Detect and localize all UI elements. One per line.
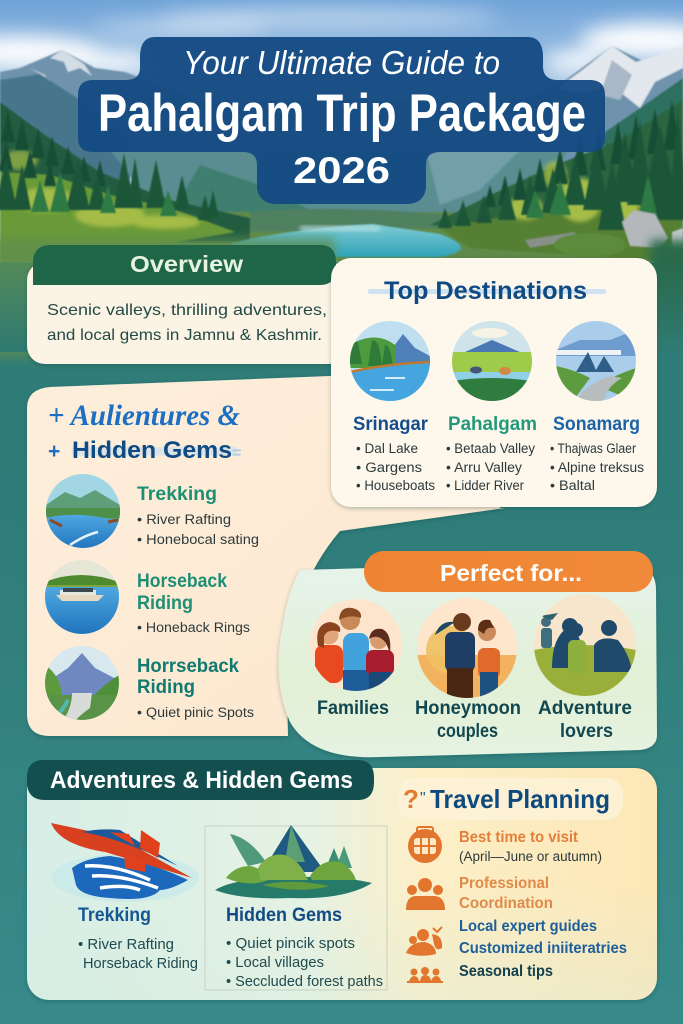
text: hidden gems: • Seccluded forest paths: [226, 974, 383, 990]
background: mountain valley landscape: [0, 0, 683, 358]
heading: travel planning: ?: [403, 784, 419, 814]
photo: srinagar: [350, 321, 430, 402]
icon: island with mountain: [215, 825, 372, 898]
label: adventure lovers: lovers: [560, 721, 613, 742]
label: honeymoon couples: [415, 698, 521, 742]
illustration: family: [310, 599, 402, 693]
box: hidden gems: [205, 825, 387, 990]
text: horseback riding: Horseback: [137, 571, 227, 592]
column: sonamarg: • Baltal: [550, 478, 595, 493]
column: sonamarg: • Alpine treksus: [550, 460, 644, 475]
column: pahalgam: • Lidder River: [446, 478, 524, 493]
column: pahalgam: • Arru Valley: [446, 460, 522, 475]
overview text: [47, 302, 327, 344]
title line 2: Pahalgam Trip Package: [98, 84, 586, 143]
rocks: [622, 210, 668, 248]
title banner: [78, 37, 605, 204]
panel: perfect for: [278, 551, 657, 757]
text: trekking: Trekking: [137, 484, 217, 505]
photo: lake boat: [45, 560, 119, 635]
label: honeymoon couples: couples: [437, 721, 498, 742]
label: honeymoon couples: Honeymoon: [415, 698, 521, 719]
heading: bold line: =: [232, 445, 241, 462]
river: [228, 224, 461, 257]
title line 1: Your Ultimate Guide to: [183, 44, 500, 81]
icon: guides: [406, 927, 442, 956]
heading: bold line: Hidden Gems: [72, 437, 232, 464]
valley floor: [0, 212, 683, 262]
text: trekking: [78, 905, 198, 972]
heading: top destinations: Top Destinations: [384, 277, 587, 305]
text: trekking: • River Rafting: [78, 937, 174, 953]
heading: script line: + Aulientures &: [48, 399, 240, 432]
text: hidden gems: • Quiet pincik spots: [226, 936, 355, 952]
heading: travel planning: ": [420, 790, 426, 807]
text: trekking: • Honebocal sating: [137, 532, 259, 547]
text: trekking: Horseback Riding: [83, 956, 198, 972]
forest slopes: [0, 102, 250, 242]
title year: 2026: [293, 150, 390, 191]
column: sonamarg: [550, 414, 644, 493]
text: best time to visit: [459, 829, 602, 864]
heading: travel planning: [398, 778, 623, 820]
panel: overview: [27, 245, 347, 364]
illustration: adventure group: [534, 594, 636, 700]
column: sonamarg: Sonamarg: [553, 414, 640, 435]
column: srinagar: Srinagar: [353, 414, 429, 435]
column: srinagar: [353, 414, 435, 493]
icon: river raft: [51, 823, 199, 902]
text: hidden gems: • Local villages: [226, 955, 324, 971]
column: pahalgam: [446, 414, 537, 493]
column: pahalgam: Pahalgam: [448, 414, 537, 435]
label: families: Families: [317, 698, 389, 719]
text: horseback riding: • Honeback Rings: [137, 620, 250, 635]
overview text: and local gems in Jamnu & Kashmir.: [47, 327, 322, 344]
panel: top destinations: [331, 258, 657, 507]
text: professional coordination: Coordination: [459, 895, 553, 912]
icon: seasonal people: [407, 967, 443, 983]
text: hidden gems: Hidden Gems: [226, 905, 342, 926]
text: professional coordination: [459, 875, 553, 912]
icon: group of people: [406, 878, 445, 910]
illustration: couple: [417, 598, 517, 700]
heading: travel planning: Travel Planning: [430, 784, 610, 814]
conifers near: [0, 153, 219, 220]
orange heading pill: [364, 551, 653, 592]
column: srinagar: • Gargens: [356, 460, 422, 475]
conifers far: [0, 100, 680, 207]
photo: river rafting: [46, 474, 120, 550]
fade to teal: [0, 238, 335, 358]
text: hidden gems: [226, 905, 383, 990]
panel: adventures and travel planning: [27, 760, 657, 1000]
text: guides and itineraries: Customized iniiteratries: [459, 940, 627, 957]
text: trekking: [137, 484, 259, 547]
text: horseback riding 2: • Quiet pinic Spots: [137, 705, 254, 720]
text: horseback riding: Riding: [137, 593, 193, 614]
text: best time to visit: Best time to visit: [459, 829, 578, 846]
text: horseback riding 2: Riding: [137, 677, 195, 698]
text: guides and itineraries: [459, 918, 627, 957]
label: adventure lovers: [538, 698, 632, 742]
photo: sonamarg: [556, 321, 636, 402]
text: best time to visit: (April—June or autumn): [459, 849, 602, 864]
column: pahalgam: • Betaab Valley: [446, 441, 535, 456]
heading: bold line: +: [48, 440, 60, 463]
column: srinagar: • Houseboats: [356, 478, 435, 493]
text: professional coordination: Professional: [459, 875, 549, 892]
label: adventure lovers: Adventure: [538, 698, 632, 719]
overview heading pill: [33, 245, 336, 285]
heading pill: adventures and hidden gems: [27, 760, 374, 800]
text: horseback riding 2: Horrseback: [137, 656, 239, 677]
overview text: Scenic valleys, thrilling adventures,: [47, 302, 327, 319]
orange heading pill: Perfect for...: [440, 560, 582, 586]
column: sonamarg: • Thajwas Glaer: [550, 441, 636, 456]
panel: adventures and hidden gems list: [27, 376, 505, 736]
text: trekking: • River Rafting: [137, 512, 231, 527]
overview heading pill: Overview: [130, 251, 243, 277]
heading pill: adventures and hidden gems: Adventures & Hidden Gems: [50, 767, 353, 794]
text: horseback riding: [137, 571, 250, 635]
photo: pahalgam: [452, 321, 532, 402]
text: seasonal tips: Seasonal tips: [459, 963, 553, 980]
far mountains: [0, 46, 683, 170]
text: horseback riding 2: [137, 656, 254, 720]
photo: mountain stream: [45, 646, 119, 722]
text: trekking: Trekking: [78, 905, 151, 926]
text: guides and itineraries: Local expert guides: [459, 918, 597, 935]
column: srinagar: • Dal Lake: [356, 441, 418, 456]
icon: calendar: [408, 827, 442, 863]
